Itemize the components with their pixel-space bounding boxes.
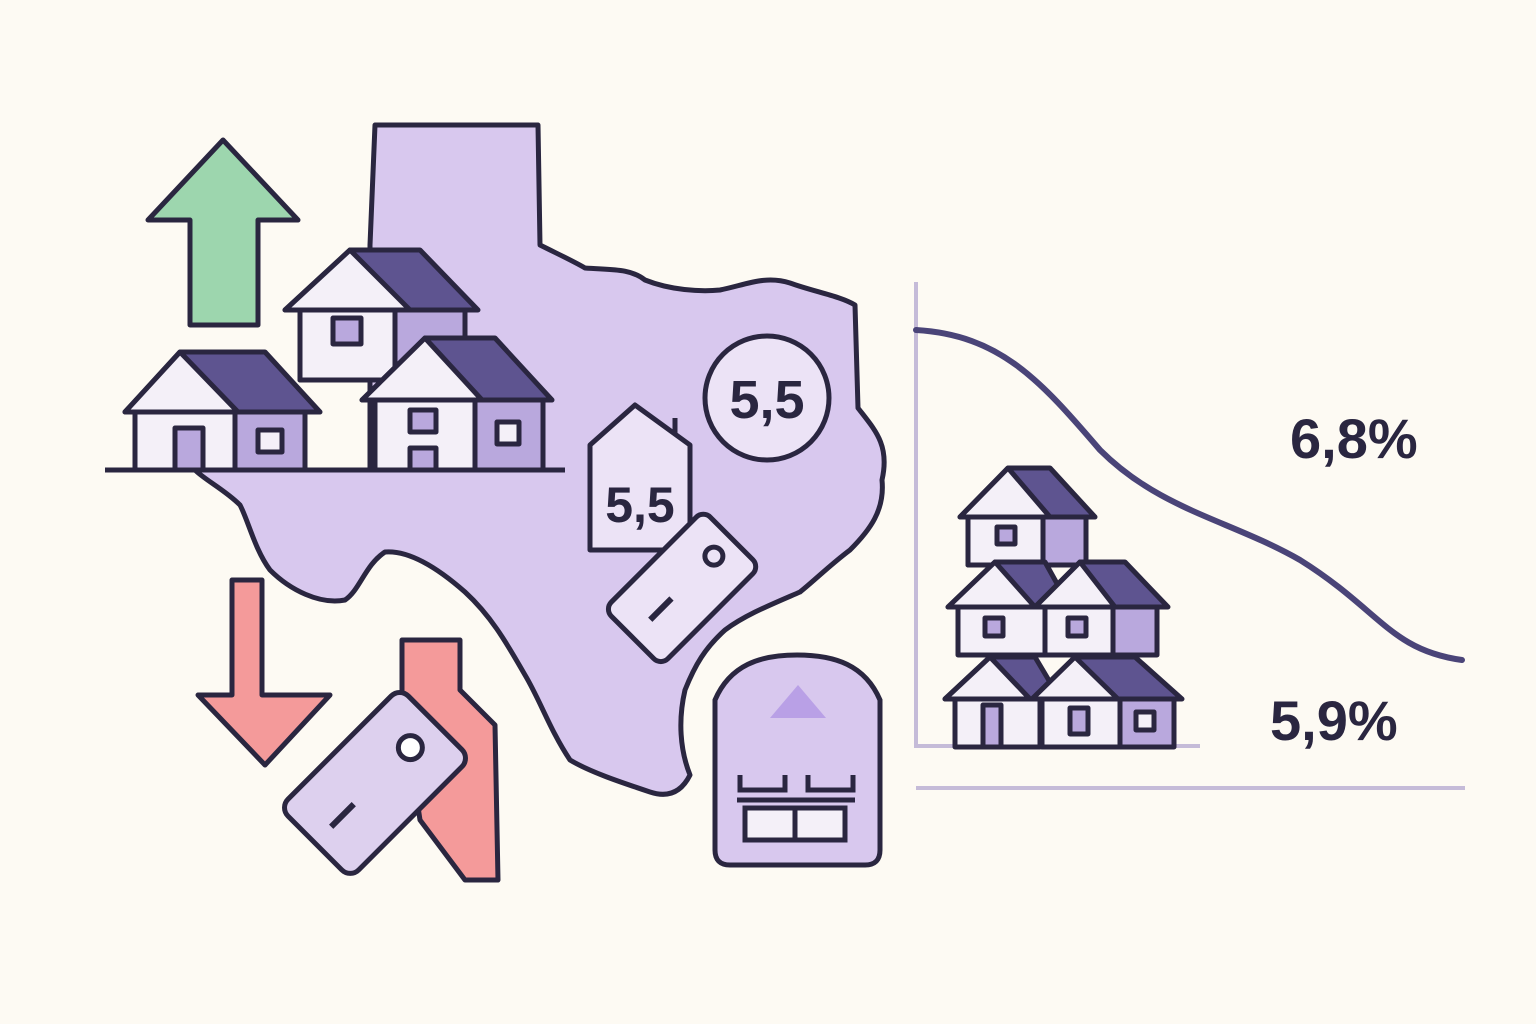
house: back [285,250,478,380]
circle badge 5,5 [705,336,829,460]
house: left [125,352,320,470]
price tag tilted [604,510,760,666]
price tag red area [280,687,470,878]
price tag 5,5 [590,405,690,550]
label 5,9%: 5,9% [1270,689,1398,752]
map: Texas [195,125,884,794]
chart: rate decline [916,282,1465,788]
houses stack [945,468,1182,747]
houses cluster left [105,250,565,470]
house: right [362,338,552,470]
label 6,8%: 6,8% [1290,407,1418,470]
arrow: green up [148,140,298,325]
circle badge 5,5: 5,5 [729,370,805,430]
price tag 5,5: 5,5 [605,477,675,533]
arrow: red down [198,580,498,880]
home sale tag [715,655,880,865]
